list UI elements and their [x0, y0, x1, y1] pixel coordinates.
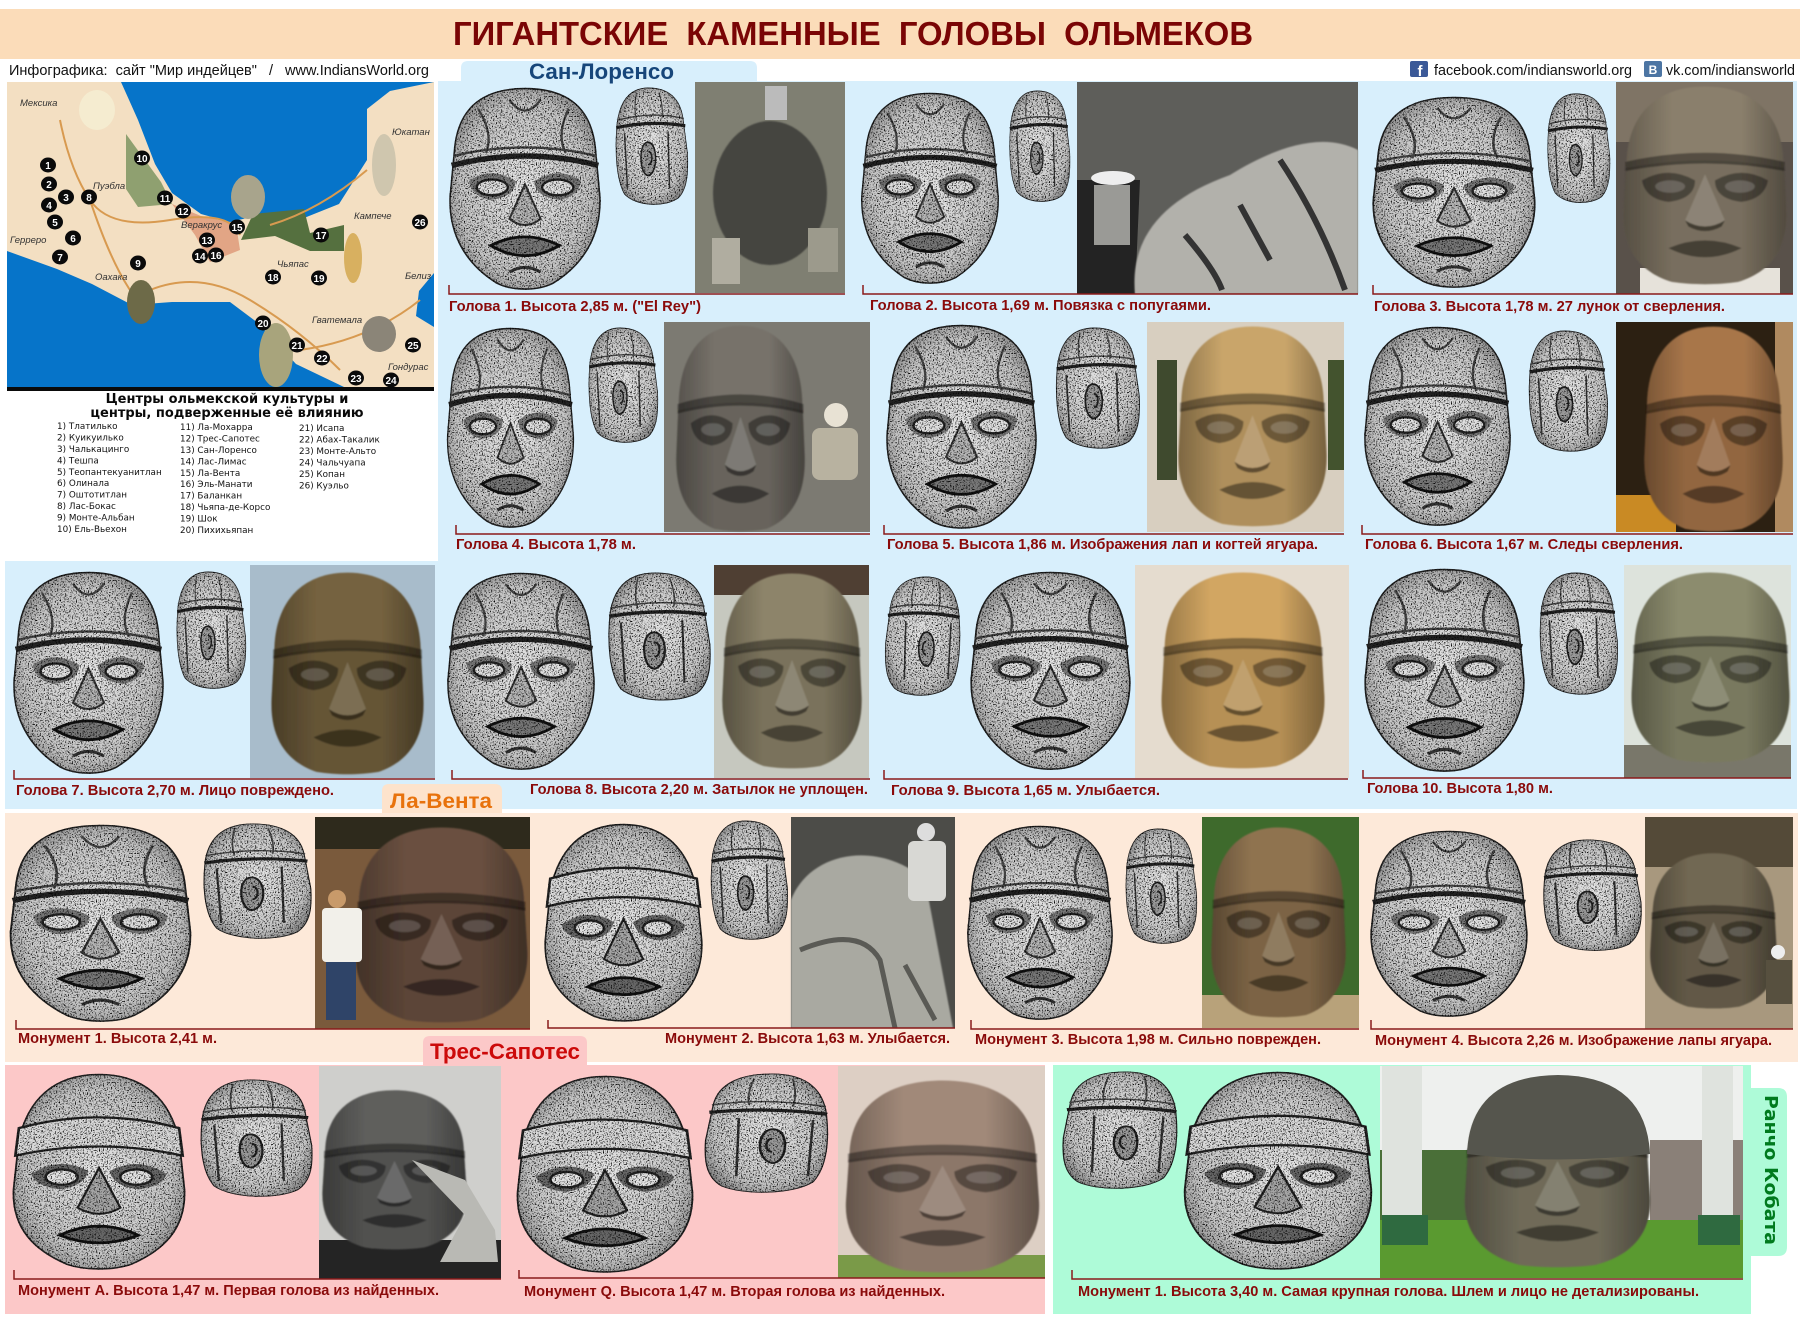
legend column 2: 18) Чьяпа-де-Корсо: [180, 503, 270, 513]
legend column 2: 20) Пихихьяпан: [180, 526, 253, 536]
map site number markers: [40, 150, 428, 388]
title banner: ГИГАНТСКИЕ КАМЕННЫЕ ГОЛОВЫ ОЛЬМЕКОВ: [453, 15, 1253, 52]
head 1: [449, 82, 845, 315]
legend column 3: 24) Чальчуапа: [299, 458, 366, 468]
monument A: [13, 1066, 501, 1299]
map site number markers: 10: [136, 154, 148, 165]
head 6: Голова 6. Высота 1,67 м. Следы сверления.: [1365, 536, 1683, 553]
map site number markers: 2: [46, 180, 52, 191]
head 9: [884, 565, 1349, 799]
monument 4: Монумент 4. Высота 2,26 м. Изображение лапы ягуара.: [1375, 1032, 1772, 1049]
head 5: [884, 322, 1344, 553]
map site number markers: 8: [86, 193, 92, 204]
La Venta tab label: [382, 784, 502, 813]
head 7: [14, 565, 435, 799]
legend column 1: 10) Ель-Вьехон: [57, 525, 127, 535]
map site number markers: 5: [52, 218, 58, 229]
monument 1 Rancho Cobata: [1063, 1066, 1743, 1300]
legend column 1: 1) Тлатилько: [57, 422, 118, 432]
head 4: Голова 4. Высота 1,78 м.: [456, 536, 636, 553]
head 4: [448, 322, 870, 553]
legend column 3: [299, 424, 380, 492]
head 10: Голова 10. Высота 1,80 м.: [1367, 780, 1553, 797]
head 3: [1373, 82, 1793, 315]
head 7: Голова 7. Высота 2,70 м. Лицо повреждено.: [16, 782, 334, 799]
head 3: Голова 3. Высота 1,78 м. 27 лунок от сверления.: [1374, 298, 1725, 315]
map region labels: Оахака: [95, 272, 127, 283]
map site number markers: 3: [63, 193, 69, 204]
legend column 1: 6) Олинала: [57, 479, 109, 489]
panel: Rancho Cobata: [1053, 1065, 1787, 1314]
monument 1 Rancho Cobata: Монумент 1. Высота 3,40 м. Самая крупная голова. Шлем и лицо не детализированы.: [1078, 1283, 1699, 1300]
map site number markers: 11: [160, 194, 171, 205]
head 10: [1363, 565, 1791, 797]
head 8: Голова 8. Высота 2,20 м. Затылок не уплощен.: [530, 781, 868, 798]
map site number markers: 20: [257, 319, 269, 330]
legend column 1: 7) Оштотитлан: [57, 490, 127, 500]
map region labels: Чьяпас: [277, 259, 309, 270]
La Venta tab label: Ла-Вента: [390, 790, 492, 813]
map legend: [57, 392, 380, 536]
Rancho Cobata side tab: Ранчо Кобата: [1760, 1095, 1781, 1245]
panel: La Venta: [5, 784, 1798, 1062]
monument 1: Монумент 1. Высота 2,41 м.: [18, 1030, 217, 1047]
monument 4: [1371, 817, 1793, 1049]
map site number markers: 25: [407, 341, 419, 352]
social links: f: [1418, 63, 1424, 80]
map site number markers: 17: [315, 231, 327, 242]
legend column 1: 2) Куикуилько: [57, 434, 124, 444]
legend column 1: 9) Монте-Альбан: [57, 514, 135, 524]
map site number markers: 19: [313, 274, 325, 285]
legend column 1: 5) Теопантекуанитлан: [57, 468, 162, 478]
panel: San Lorenzo: [5, 59, 1797, 809]
map site number markers: 15: [231, 223, 243, 234]
map site number markers: 23: [350, 374, 362, 385]
map site number markers: 7: [57, 253, 63, 264]
head 8: [448, 565, 870, 798]
legend column 1: [57, 422, 162, 535]
map region labels: [10, 98, 432, 373]
head 9: Голова 9. Высота 1,65 м. Улыбается.: [891, 782, 1160, 799]
head 2: [862, 82, 1358, 314]
head 6: [1362, 322, 1793, 553]
legend column 2: 15) Ла-Вента: [180, 469, 240, 479]
map site number markers: 13: [201, 236, 213, 247]
legend column 3: 23) Монте-Альто: [299, 447, 376, 457]
social links: [1410, 61, 1795, 80]
social links: vk.com/indiansworld: [1666, 63, 1795, 79]
head 5: Голова 5. Высота 1,86 м. Изображения лап и когтей ягуара.: [887, 536, 1318, 553]
map site number markers: 12: [177, 207, 189, 218]
monument A: Монумент A. Высота 1,47 м. Первая голова из найденных.: [18, 1282, 439, 1299]
legend column 1: 8) Лас-Бокас: [57, 502, 116, 512]
legend column 2: [180, 423, 270, 536]
map site number markers: 14: [194, 252, 206, 263]
map region labels: Пуэбла: [93, 181, 125, 192]
monument Q: [518, 1066, 1045, 1300]
legend column 2: 17) Баланкан: [180, 492, 242, 502]
legend column 3: 21) Исапа: [299, 424, 344, 434]
map site number markers: 18: [267, 273, 279, 284]
map site number markers: 26: [414, 218, 426, 229]
map region labels: Гондурас: [388, 362, 429, 373]
legend column 1: 3) Чалькацинго: [57, 445, 129, 455]
map site number markers: 24: [385, 376, 397, 387]
monument 2: [545, 817, 955, 1047]
map site number markers: 6: [70, 234, 76, 245]
legend column 2: 16) Эль-Манати: [180, 480, 253, 490]
panel: Tres Zapotes: [5, 1036, 1045, 1314]
Tres Zapotes tab label: Трес-Сапотес: [430, 1039, 580, 1064]
legend column 2: 14) Лас-Лимас: [180, 458, 247, 468]
map panel: [7, 82, 434, 391]
map region labels: Веракрус: [181, 220, 222, 231]
legend column 2: 13) Сан-Лоренсо: [180, 446, 257, 456]
map site number markers: 16: [210, 251, 222, 262]
map region labels: Герреро: [10, 235, 46, 246]
map site number markers: 4: [46, 201, 52, 212]
legend heading: Центры ольмекской культуры и: [106, 392, 348, 407]
legend column 2: 19) Шок: [180, 514, 218, 524]
title banner: [0, 9, 1800, 59]
map region labels: Гватемала: [312, 315, 362, 326]
social links: facebook.com/indiansworld.org: [1434, 63, 1632, 79]
map site number markers: 22: [316, 354, 328, 365]
legend column 3: 22) Абах-Такалик: [299, 436, 380, 446]
monument 3: Монумент 3. Высота 1,98 м. Сильно поврежден.: [975, 1031, 1321, 1048]
legend column 2: 11) Ла-Мохарра: [180, 423, 253, 433]
map region labels: Мексика: [20, 98, 57, 109]
legend column 3: 26) Куэльо: [299, 482, 349, 492]
map site number markers: 1: [45, 161, 51, 172]
source credit line: Инфографика: сайт "Мир индейцев" / www.IndiansWorld.org: [9, 63, 429, 79]
head 2: Голова 2. Высота 1,69 м. Повязка с попугаями.: [870, 297, 1211, 314]
monument 3: [968, 817, 1359, 1048]
monument 2: Монумент 2. Высота 1,63 м. Улыбается.: [665, 1030, 950, 1047]
legend column 3: 25) Копан: [299, 470, 345, 480]
head 1: Голова 1. Высота 2,85 м. ("El Rey"): [449, 298, 701, 315]
legend column 1: 4) Тешпа: [57, 456, 99, 466]
monument Q: Монумент Q. Высота 1,47 м. Вторая голова из найденных.: [524, 1283, 945, 1300]
legend heading: центры, подверженные её влиянию: [90, 406, 364, 421]
map region labels: Кампече: [354, 211, 392, 222]
monument 1: [11, 817, 530, 1047]
map site number markers: 9: [135, 259, 141, 270]
social links: В: [1649, 63, 1658, 77]
map region labels: Юкатан: [392, 127, 431, 138]
legend column 2: 12) Трес-Сапотес: [180, 434, 260, 444]
map region labels: Белиз: [405, 271, 432, 282]
San Lorenzo tab label: Сан-Лоренсо: [529, 59, 674, 84]
map site number markers: 21: [291, 341, 303, 352]
Rancho Cobata side tab: [1751, 1088, 1787, 1256]
